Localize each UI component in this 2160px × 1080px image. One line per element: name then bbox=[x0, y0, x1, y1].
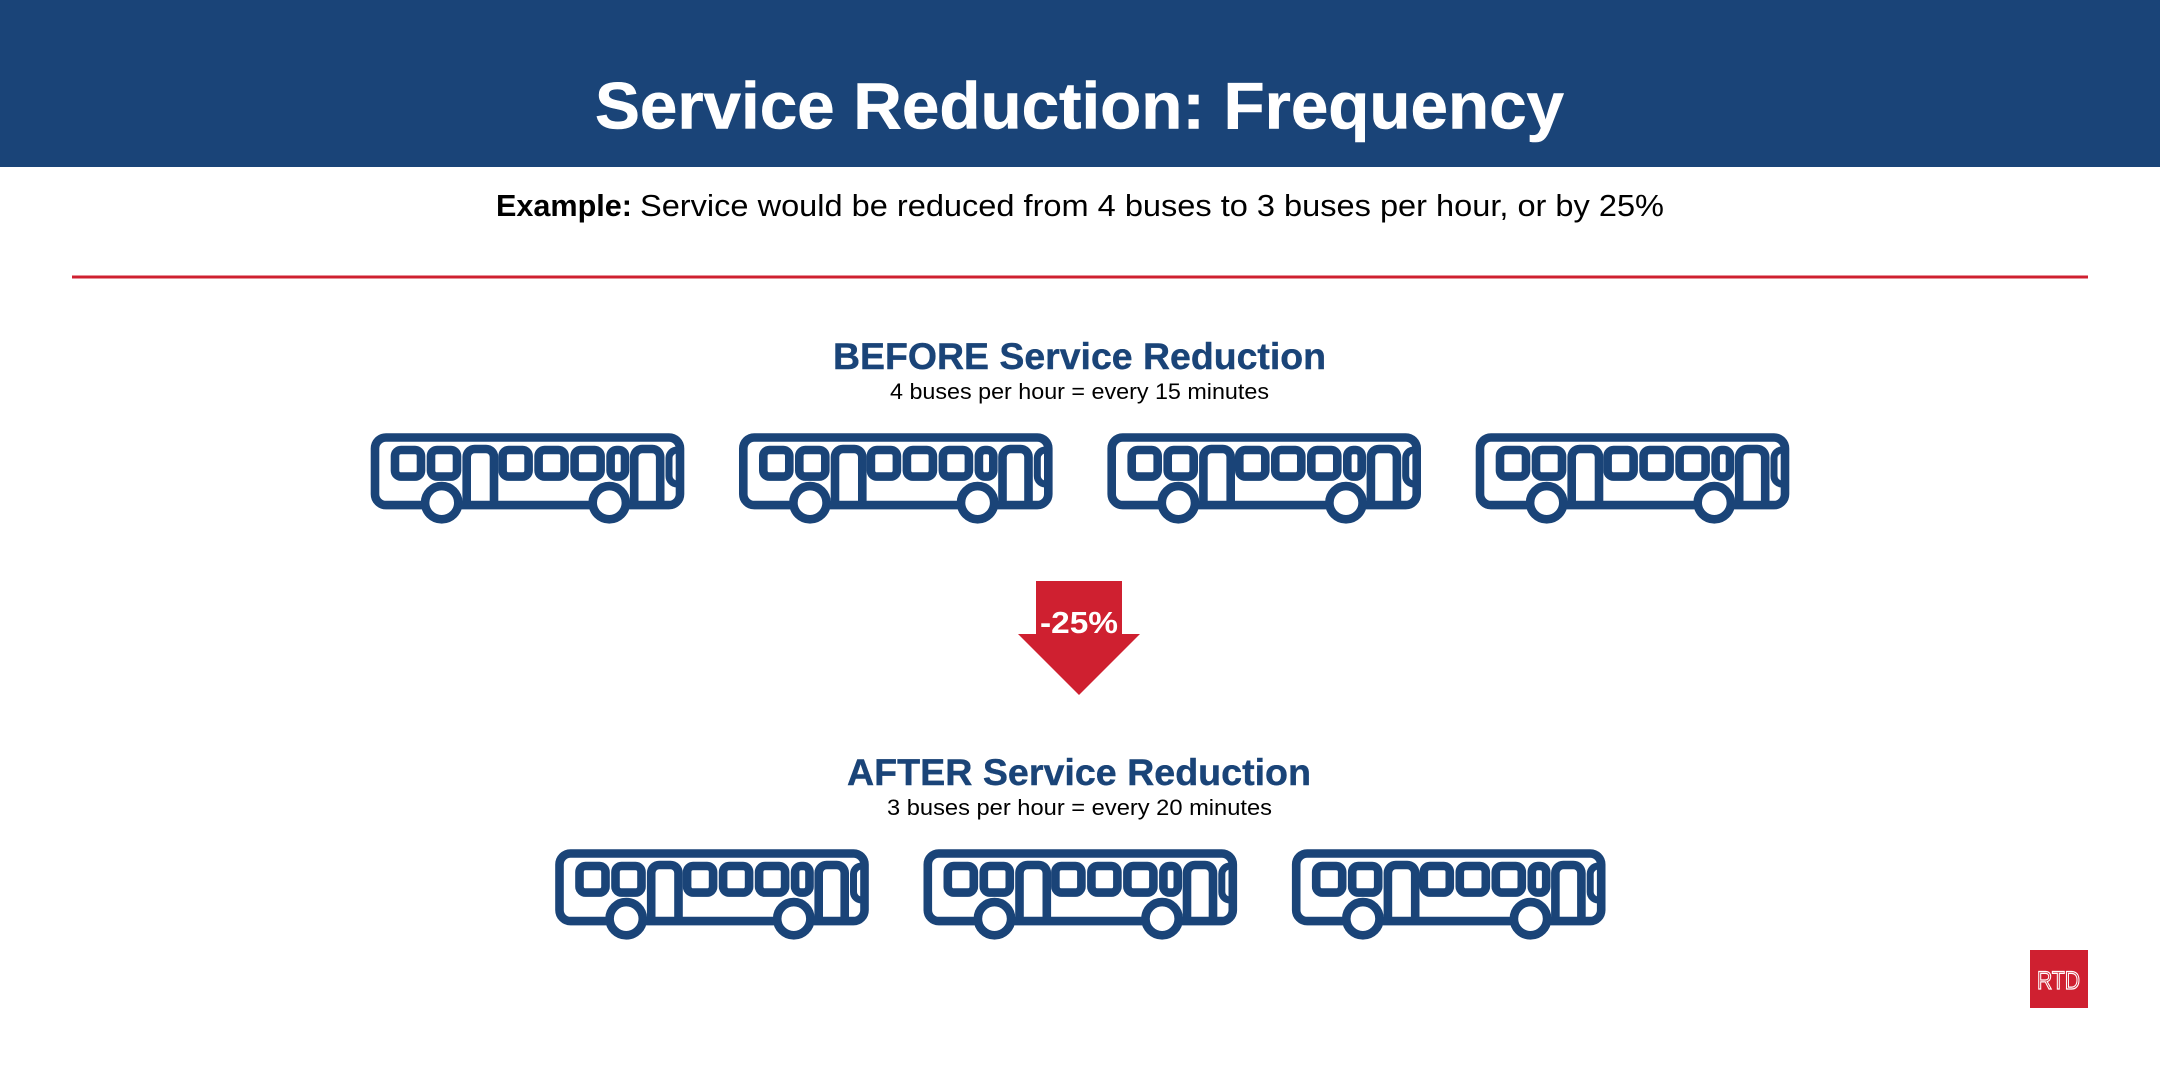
before buses row bbox=[375, 438, 1785, 519]
example text: Example: bbox=[496, 188, 632, 223]
icon: bus 3 bbox=[1112, 438, 1417, 519]
after heading: AFTER Service Reduction bbox=[847, 752, 1311, 793]
title: Service Reduction: Frequency bbox=[595, 68, 1564, 142]
icon: bus 3 bbox=[1296, 854, 1601, 935]
after buses row bbox=[560, 854, 1601, 935]
logo: RTD: RTD bbox=[2037, 967, 2080, 995]
icon: bus 1 bbox=[375, 438, 680, 519]
example text: Service would be reduced from 4 buses to 3 buses per hour, or by 25% bbox=[640, 188, 1664, 223]
header band bbox=[0, 0, 2160, 167]
icon: bus 2 bbox=[743, 438, 1048, 519]
before heading: BEFORE Service Reduction bbox=[833, 336, 1326, 377]
icon: bus 4 bbox=[1480, 438, 1785, 519]
after subheading: 3 buses per hour = every 20 minutes bbox=[887, 795, 1272, 820]
logo: RTD bbox=[2030, 950, 2088, 1008]
arrow: -25% reduction: -25% bbox=[1040, 605, 1118, 640]
before subheading: 4 buses per hour = every 15 minutes bbox=[890, 379, 1269, 404]
icon: bus 2 bbox=[928, 854, 1233, 935]
icon: bus 1 bbox=[560, 854, 864, 935]
arrow: -25% reduction bbox=[1018, 581, 1140, 695]
